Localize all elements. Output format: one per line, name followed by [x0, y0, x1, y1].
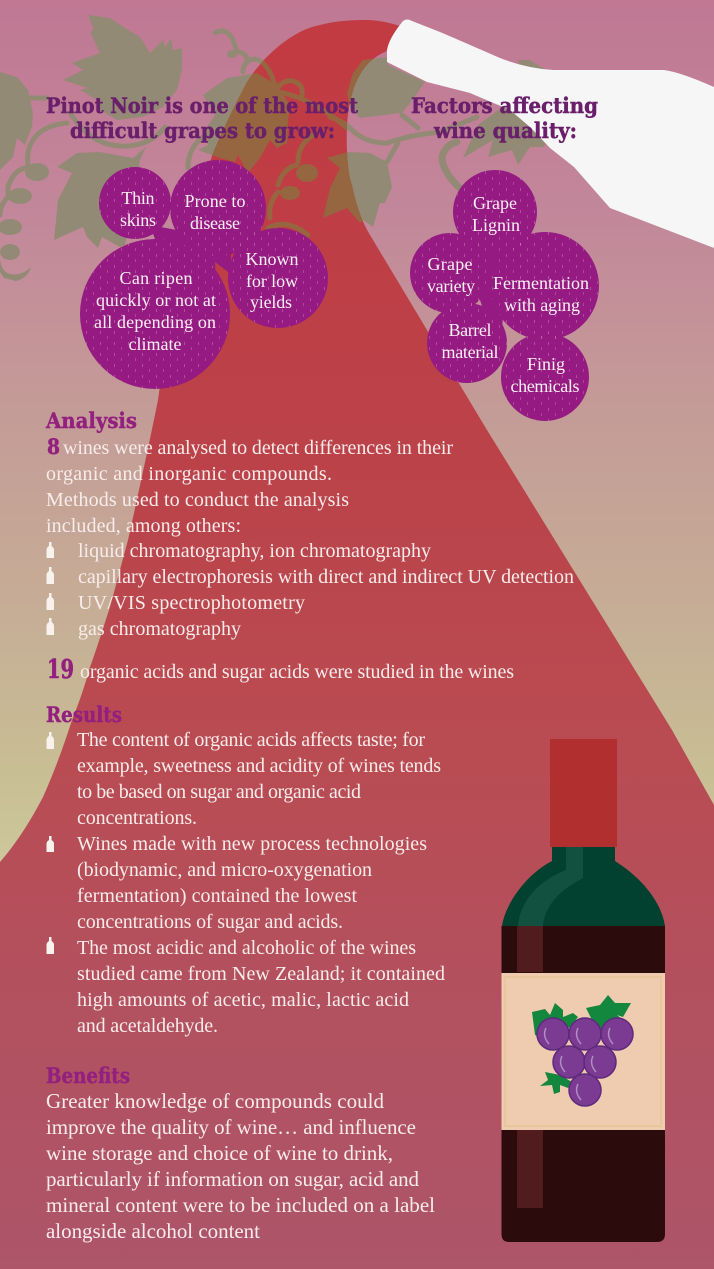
analysis body text: gas chromatography	[78, 618, 241, 640]
grape cluster: wine quality factors: with aging	[504, 295, 580, 315]
bullet icons: bottles	[46, 732, 54, 954]
benefits body text: particularly if information on sugar, acid and	[46, 1167, 420, 1191]
results body text: Wines made with new process technologies	[77, 833, 427, 855]
benefits body text: mineral content were to be included on a label	[46, 1193, 435, 1217]
grape cluster: Pinot Noir difficulties: Known	[246, 249, 298, 269]
results body text: and acetaldehyde.	[77, 1015, 218, 1037]
grape cluster: Pinot Noir difficulties: all depending on	[94, 312, 216, 332]
results body text: concentrations.	[77, 807, 197, 829]
heading: Factors affecting wine quality	[411, 93, 598, 143]
body highlight upper	[517, 926, 543, 972]
analysis body text: organic and inorganic compounds.	[46, 463, 332, 485]
analysis body text: capillary electrophoresis with direct and indirect UV detection	[78, 566, 574, 588]
bottle body	[502, 926, 665, 1242]
benefits body text: Greater knowledge of compounds could	[46, 1089, 384, 1113]
heading: Factors affecting wine quality: Factors affecting	[411, 93, 598, 118]
grape cluster: wine quality factors: Grape	[473, 193, 517, 213]
results body text: studied came from New Zealand; it contained	[77, 963, 445, 985]
results body text	[77, 729, 445, 1037]
heading: Pinot Noir	[46, 93, 358, 143]
vine and leaves behind wine	[0, 15, 560, 281]
results body text: The content of organic acids affects taste; for	[77, 729, 425, 751]
analysis body text: UV/VIS spectrophotometry	[78, 592, 305, 614]
heading: benefits: Benefits	[46, 1063, 130, 1088]
grape cluster: wine quality factors: chemicals	[510, 376, 580, 396]
grape cluster: wine quality factors: Fermentation	[493, 273, 589, 293]
heading: results: Results	[46, 702, 122, 727]
pouring white bottle	[387, 20, 714, 248]
results body text: high amounts of acetic, malic, lactic acid	[77, 989, 409, 1011]
heading: Pinot Noir: difficult grapes to grow:	[70, 118, 335, 143]
grape cluster: Pinot Noir difficulties	[80, 160, 328, 389]
heading: analysis: Analysis	[45, 408, 137, 433]
stat: 19 organic acids: 19	[47, 655, 74, 685]
stat: 8 wines: 8	[47, 434, 60, 459]
vine overlapping wine stream	[212, 58, 374, 238]
grape cluster: wine quality factors: Lignin	[472, 215, 520, 235]
results body text: The most acidic and alcoholic of the wines	[77, 937, 416, 959]
analysis body text: Methods used to conduct the analysis	[46, 489, 349, 511]
heading: Factors affecting wine quality: wine quality:	[433, 118, 577, 143]
label inner border	[505, 977, 661, 1126]
analysis body text	[46, 437, 574, 640]
section: results	[46, 702, 445, 1037]
results body text: (biodynamic, and micro-oxygenation	[77, 859, 372, 881]
results body text: concentrations of sugar and acids.	[77, 911, 343, 933]
bottle shoulders	[502, 847, 665, 926]
grape cluster: wine quality factors: Grape	[428, 254, 472, 274]
organic acids text: organic acids and sugar acids were studied in the wines	[80, 661, 514, 683]
shoulder highlight	[518, 847, 583, 926]
grape cluster: Pinot Noir difficulties: Can ripen	[120, 268, 192, 288]
benefits body text: improve the quality of wine… and influence	[46, 1115, 416, 1139]
grape cluster: Pinot Noir difficulties: quickly or not at	[96, 290, 216, 310]
bottle label	[502, 973, 665, 1130]
grape cluster: Pinot Noir difficulties: climate	[128, 334, 182, 354]
body highlight lower	[517, 1130, 543, 1208]
wine bottle illustration	[502, 739, 665, 1242]
grape cluster: Pinot Noir difficulties: Prone to	[184, 191, 246, 211]
bottle foil cap	[550, 739, 617, 847]
grape cluster: wine quality factors: variety	[427, 276, 475, 296]
grape cluster: wine quality factors: Finig	[527, 354, 565, 374]
bullet icons: bottles	[46, 542, 54, 635]
results body text: to be based on sugar and organic acid	[77, 781, 361, 803]
grape cluster: Pinot Noir difficulties: Thin	[122, 188, 154, 208]
section: analysis	[45, 408, 574, 685]
benefits body text: alongside alcohol content	[46, 1219, 260, 1243]
results body text: example, sweetness and acidity of wines tends	[77, 755, 441, 777]
analysis body text: included, among others:	[46, 515, 241, 537]
analysis body text: liquid chromatography, ion chromatography	[78, 540, 431, 562]
grape cluster: Pinot Noir difficulties: disease	[190, 213, 240, 233]
benefits body text: wine storage and choice of wine to drink,	[46, 1141, 393, 1165]
analysis body text: wines were analysed to detect differences in their	[63, 437, 453, 459]
grape cluster: Pinot Noir difficulties: skins	[120, 210, 156, 230]
grape cluster: Pinot Noir difficulties: yields	[250, 292, 292, 312]
grape cluster: wine quality factors: material	[442, 342, 498, 362]
grape cluster: Pinot Noir difficulties: for low	[246, 271, 298, 291]
heading: Pinot Noir: Pinot Noir is one of the most	[46, 93, 358, 118]
section: benefits	[46, 1063, 435, 1243]
results body text: fermentation) contained the lowest	[77, 885, 357, 907]
label grapes and leaves	[532, 995, 633, 1106]
benefits body text	[46, 1089, 435, 1243]
grape cluster: wine quality factors: Barrel	[448, 320, 492, 340]
grape cluster: wine quality factors	[410, 170, 599, 421]
